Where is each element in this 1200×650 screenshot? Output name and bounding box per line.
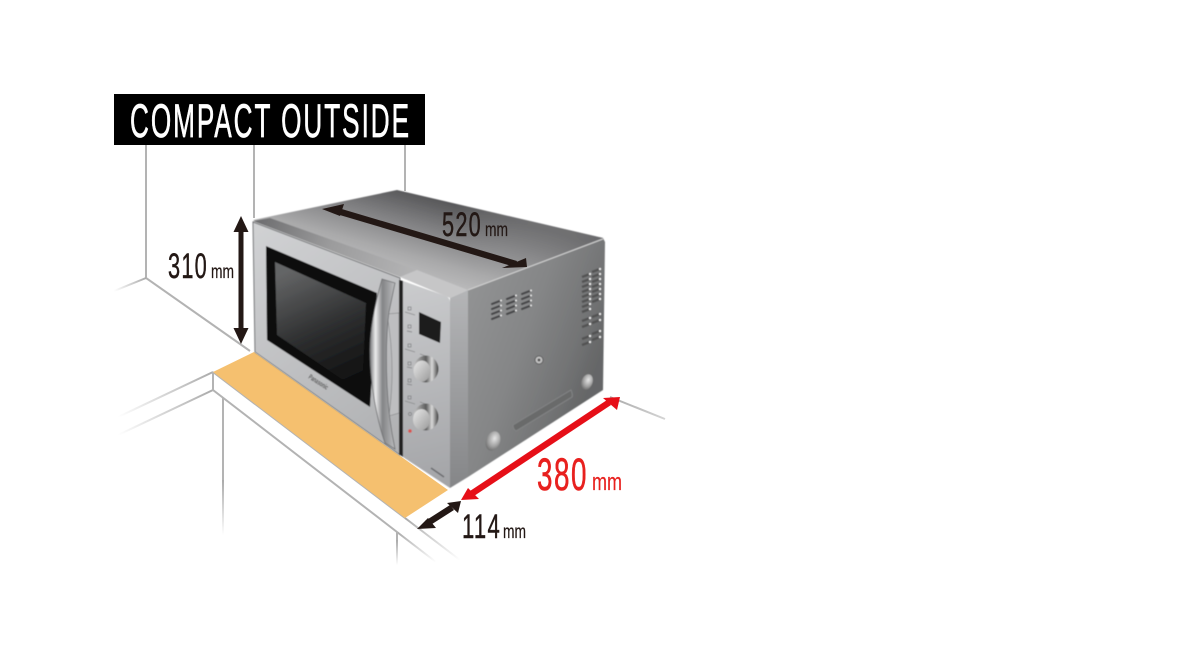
microwave oven [253, 190, 605, 488]
title [114, 94, 425, 147]
power indicator [408, 429, 412, 433]
door handle inner panel [387, 313, 399, 416]
label: width 520 mm: 520 [442, 206, 482, 244]
highlighted counter depth area [213, 352, 448, 518]
arrow: width [322, 204, 527, 268]
label: height 310 mm: 310 [168, 247, 208, 286]
timer knob [414, 356, 438, 382]
door window frame [266, 246, 377, 407]
door panel gap [399, 280, 403, 457]
panel button labels [405, 312, 428, 405]
screw [535, 356, 543, 364]
side front strip [450, 290, 468, 488]
vent highlights [500, 268, 601, 343]
arrow: depth [461, 397, 620, 500]
door [253, 222, 400, 455]
display [419, 312, 441, 343]
label: clearance 114 mm: mm [503, 522, 526, 543]
side top vents [492, 290, 531, 319]
door handle [370, 279, 395, 449]
panel buttons [408, 307, 412, 416]
label: depth 380 mm: 380 [537, 449, 588, 500]
door window glass [275, 262, 366, 393]
side feet [483, 373, 595, 453]
label: height 310 mm: mm [211, 262, 234, 283]
title: COMPACT OUTSIDE [130, 94, 411, 147]
side face [468, 238, 605, 477]
top face [253, 190, 603, 296]
brand name: Panasonic [307, 374, 329, 392]
label: clearance 114 mm: 114 [462, 508, 501, 546]
arrow: clearance [417, 501, 461, 529]
control panel [403, 281, 450, 488]
label: width 520 mm: mm [485, 220, 508, 241]
side slot [513, 390, 572, 431]
label: depth 380 mm: mm [592, 469, 622, 496]
side rear vents [582, 269, 600, 345]
room and counter outlines [114, 145, 665, 565]
power knob [413, 404, 438, 430]
model label [431, 468, 444, 477]
top front band [253, 218, 417, 277]
side edge highlight [468, 239, 603, 290]
arrow: height [234, 216, 248, 344]
